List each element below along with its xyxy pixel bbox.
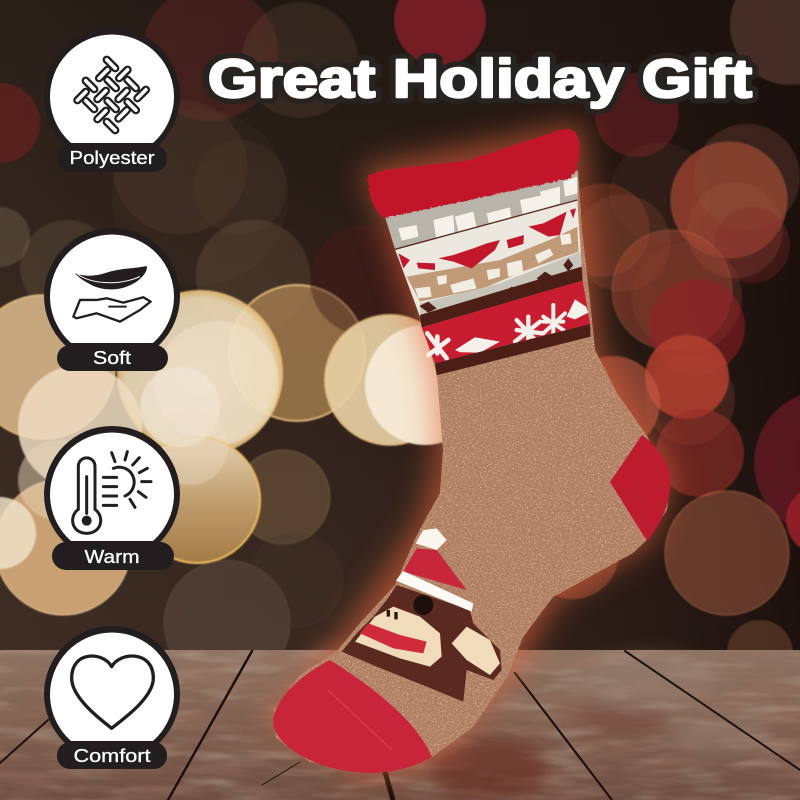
eye [413,595,433,615]
tan band white spots [415,233,572,298]
toe [273,660,432,773]
monkey head [342,585,502,702]
badge: Warm [44,426,180,570]
badge: Soft [44,228,180,371]
white diamonds [455,299,588,353]
title: Great Holiday Gift [208,49,752,109]
grey lower strip [420,252,582,317]
brown stars [419,258,573,313]
orange glow behind sock [274,128,670,773]
badge: Polyester [44,28,180,172]
wooden table [0,643,800,800]
lower dark band [435,324,591,375]
hat brim [396,571,473,612]
title: Great Holiday Gift [208,49,752,109]
icon: thermometer and sun [73,452,151,533]
tan zigzag band [407,227,579,302]
badge: Polyester: Polyester [70,148,154,168]
grey band white blocks [398,177,577,242]
muzzle [355,607,442,667]
bokeh lights: warm left [0,0,442,650]
top dark stripe [395,200,577,249]
icon: feather and hand [73,266,151,322]
badge: Soft: Soft [93,348,131,368]
badge: Comfort [44,626,180,769]
icon: heart [72,656,153,728]
hat [403,548,467,590]
toe seam [328,690,392,750]
mouth [360,623,427,653]
bokeh lights: red right [394,0,800,686]
badge: Comfort: Comfort [74,746,150,766]
nostrils [387,610,398,619]
badge: Warm: Warm [84,547,140,567]
white snowflakes [427,305,565,358]
red hearts [398,208,576,270]
dark band [420,267,583,327]
sock monkey motif [342,528,502,702]
heel [610,435,670,541]
sock body [274,170,668,764]
patterned cuff bands [368,129,591,375]
fuzzy red cuff [368,129,579,218]
white patterned band [395,200,582,317]
red snowflake band [422,281,590,363]
hat pompom [416,528,447,550]
grey band [385,172,578,249]
sock [260,129,680,780]
ear [452,627,500,675]
icon: woven fabric [73,56,150,134]
